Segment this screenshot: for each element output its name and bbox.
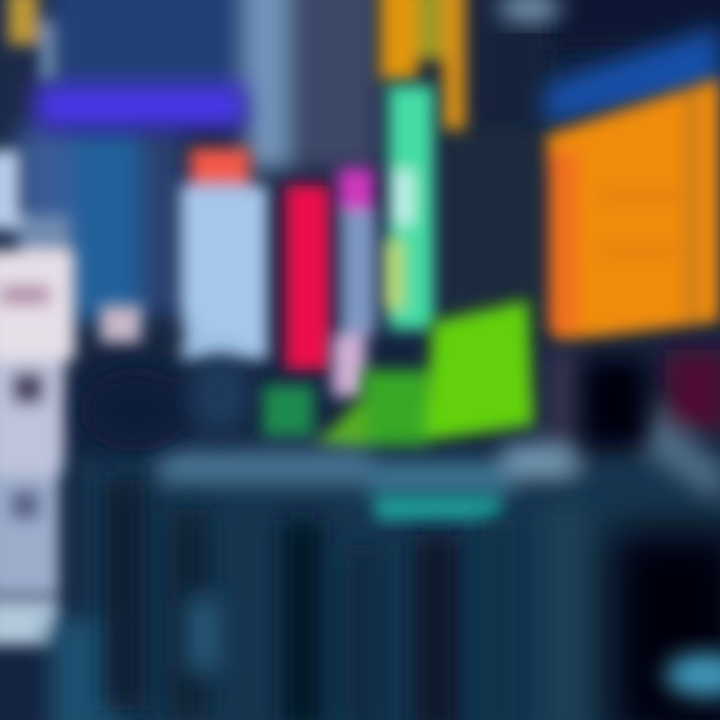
teal street glow <box>375 495 500 521</box>
bright green sign <box>262 300 536 450</box>
left white signage column <box>0 150 142 645</box>
street crowd base <box>50 350 720 720</box>
bottom right cyan highlight <box>665 653 720 697</box>
mint green vertical sign <box>382 85 434 330</box>
crimson sign <box>285 185 330 370</box>
top left yellow sign <box>8 0 56 80</box>
purple neon band <box>35 84 245 128</box>
pale tower with red top <box>180 148 268 360</box>
right blue awning <box>545 25 720 125</box>
orange billboard <box>546 78 720 342</box>
top pale highlight <box>498 0 562 22</box>
bottom right dark figure <box>612 530 720 720</box>
crowd silhouettes <box>80 321 646 720</box>
orange and yellow vertical signs <box>380 0 466 130</box>
pink and pale sign <box>332 168 376 397</box>
upper buildings background <box>0 0 720 320</box>
